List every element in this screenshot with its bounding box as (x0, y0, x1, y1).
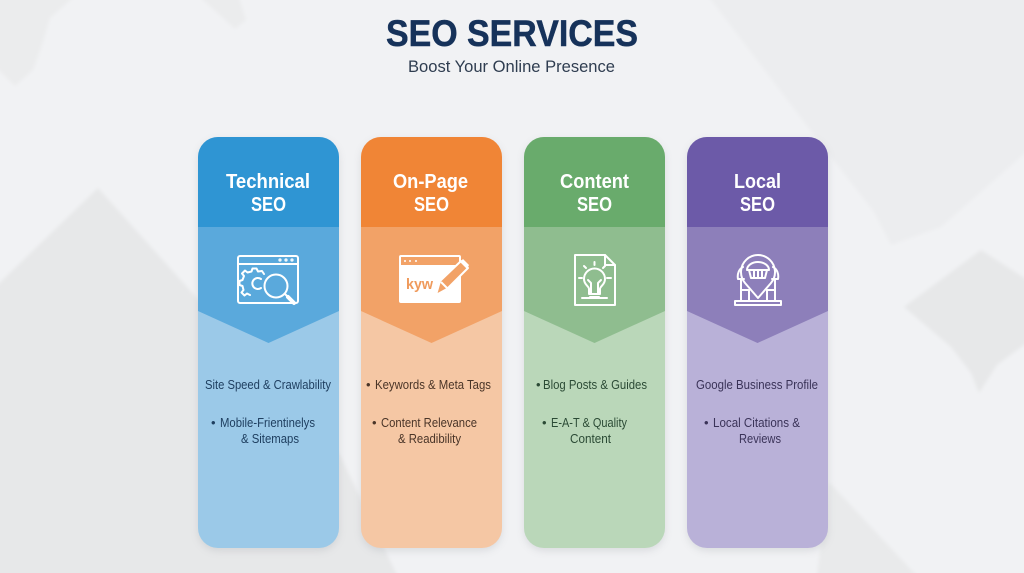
list: Technical SEO items: & Sitemaps (241, 431, 299, 446)
panel: Content SEO (524, 137, 665, 551)
list: On-Page SEO items (366, 377, 491, 446)
list: Local SEO items: Local Citations & (713, 415, 800, 430)
list: Local SEO items: Reviews (739, 431, 781, 446)
heading: Technical SEO (226, 170, 310, 216)
heading: On-Page SEO (393, 170, 468, 216)
icon: document with lightbulb (575, 255, 615, 305)
list: On-Page SEO items: Content Relevance (381, 415, 477, 430)
list: On-Page SEO items: Keywords & Meta Tags (375, 377, 491, 392)
icon: map pin with storefront (735, 255, 781, 305)
list: Local SEO items (696, 377, 818, 446)
list: Content SEO items (536, 377, 647, 446)
heading: Content SEO (560, 170, 629, 216)
icon: keyword browser with pencil: kyw (406, 276, 433, 293)
list: On-Page SEO items: & Readibility (398, 431, 461, 446)
icon: browser with gear and magnifier (238, 256, 298, 303)
icon: keyword browser with pencil (399, 255, 469, 303)
list: Technical SEO items (205, 377, 331, 446)
list: Technical SEO items: • (211, 415, 216, 430)
list: Technical SEO items: Mobile-Frientinelys (220, 415, 315, 430)
list: Content SEO items: • (536, 377, 541, 392)
heading: Local SEO: SEO (740, 193, 775, 216)
heading: On-Page SEO: On-Page (393, 170, 468, 193)
panel: Technical SEO (198, 137, 339, 551)
list: On-Page SEO items: • (366, 377, 371, 392)
list: Technical SEO items: Site Speed & Crawlability (205, 377, 331, 392)
panel: On-Page SEO (361, 137, 502, 551)
title: SEO SERVICES (386, 13, 638, 54)
subtitle: Boost Your Online Presence (408, 57, 615, 76)
heading: Local SEO: Local (734, 170, 781, 193)
panel: Local SEO (687, 137, 828, 551)
list: Content SEO items: Content (570, 431, 611, 446)
list: Content SEO items: Blog Posts & Guides (543, 377, 647, 392)
heading: Technical SEO: SEO (251, 193, 286, 216)
heading: Local SEO (734, 170, 781, 216)
list: Local SEO items: • (704, 415, 709, 430)
heading: On-Page SEO: SEO (414, 193, 449, 216)
heading: Content SEO: Content (560, 170, 629, 193)
list: On-Page SEO items: • (372, 415, 377, 430)
list: Local SEO items: Google Business Profile (696, 377, 818, 392)
list: Content SEO items: • (542, 415, 547, 430)
heading: Content SEO: SEO (577, 193, 612, 216)
list: Content SEO items: E-A-T & Quality (551, 415, 627, 430)
heading: Technical SEO: Technical (226, 170, 310, 193)
